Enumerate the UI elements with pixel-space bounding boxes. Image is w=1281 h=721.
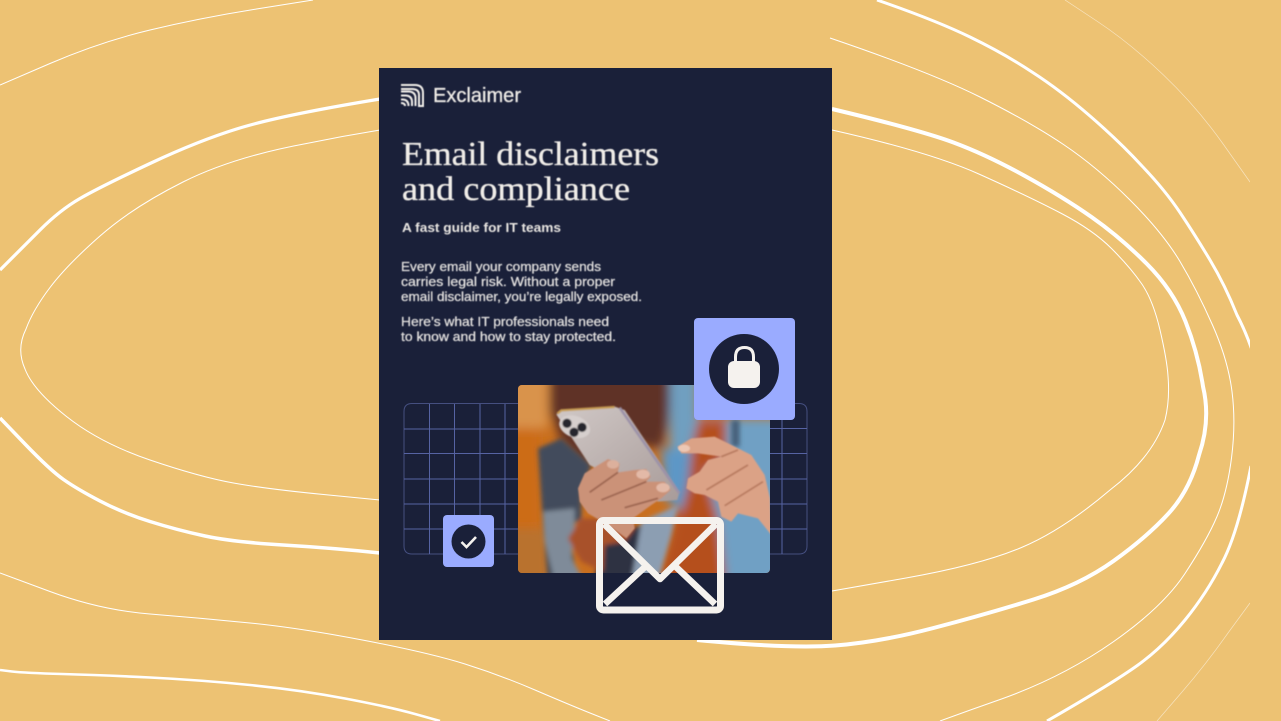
title xyxy=(402,136,659,208)
subtitle: A fast guide for IT teams xyxy=(402,221,561,235)
photo: hands holding a smartphone xyxy=(518,385,770,573)
icon: envelope xyxy=(600,520,720,610)
icon: padlock tile xyxy=(694,318,795,420)
intro text: to know and how to stay protected. xyxy=(401,330,616,344)
intro text: carries legal risk. Without a proper xyxy=(401,275,615,289)
intro text: Every email your company sends xyxy=(401,260,601,274)
intro text xyxy=(401,260,642,344)
icon: checkmark tile xyxy=(443,515,494,567)
brand name: Exclaimer xyxy=(433,85,521,107)
grid: left xyxy=(404,404,530,554)
panel: guide cover xyxy=(379,68,832,640)
intro text: Here’s what IT professionals need xyxy=(401,315,609,329)
grid: right xyxy=(760,404,807,554)
intro text: email disclaimer, you’re legally exposed. xyxy=(401,290,642,304)
icon: Exclaimer logo xyxy=(401,85,423,106)
title: Email disclaimers xyxy=(402,136,659,173)
title: and compliance xyxy=(402,171,630,208)
